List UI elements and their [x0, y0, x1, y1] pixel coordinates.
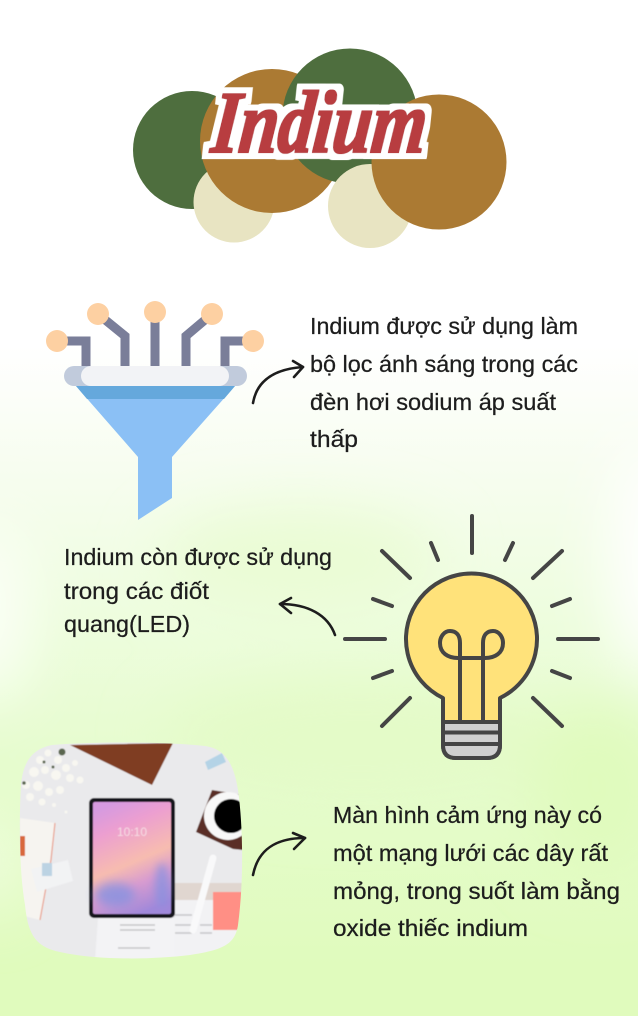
clock: 10:10 — [117, 825, 147, 839]
tablet — [89, 798, 175, 918]
title logo — [133, 48, 506, 248]
arrow: photo to text — [253, 833, 305, 875]
circle: centre brown — [200, 69, 344, 213]
title text: Indium — [207, 74, 432, 172]
icon: light bulb — [345, 516, 598, 758]
text: light filter — [310, 313, 578, 452]
sticky card — [44, 862, 72, 890]
text: LED: quang(LED) — [64, 611, 190, 637]
coaster — [196, 790, 243, 850]
notebook — [20, 818, 55, 920]
text: touch screen — [333, 802, 620, 941]
circle: left cream — [194, 162, 274, 242]
text: light filter: Indium được sử dụng làm — [310, 313, 578, 339]
circle: right brown — [372, 94, 506, 230]
brown book — [70, 743, 173, 785]
text: touch screen: Màn hình cảm ứng này có — [333, 802, 602, 828]
text: light filter: đèn hơi sodium áp suất — [310, 389, 557, 415]
icon: funnel — [46, 301, 264, 520]
arrow: bulb to text — [280, 598, 335, 635]
blue tape — [205, 753, 226, 770]
photo: tablet on desk — [20, 742, 242, 958]
coffee cup — [203, 792, 242, 841]
sticky note — [213, 892, 243, 930]
pen — [193, 858, 213, 930]
arrow: funnel to text — [253, 361, 303, 403]
text: LED — [64, 544, 332, 637]
text: touch screen: một mạng lưới các dây rất — [333, 840, 609, 866]
circle: top green — [282, 48, 418, 184]
text: touch screen: oxide thiếc indium — [333, 915, 528, 941]
text: light filter: thấp — [310, 426, 358, 452]
flowers — [22, 750, 84, 814]
text: touch screen: mỏng, trong suốt làm bằng — [333, 878, 620, 904]
text: light filter: bộ lọc ánh sáng trong các — [310, 351, 578, 377]
text: LED: Indium còn được sử dụng — [64, 544, 332, 570]
text: LED: trong các điốt — [64, 578, 210, 604]
circle: right cream — [328, 164, 412, 248]
circle: left green — [133, 91, 251, 209]
papers — [96, 918, 176, 958]
